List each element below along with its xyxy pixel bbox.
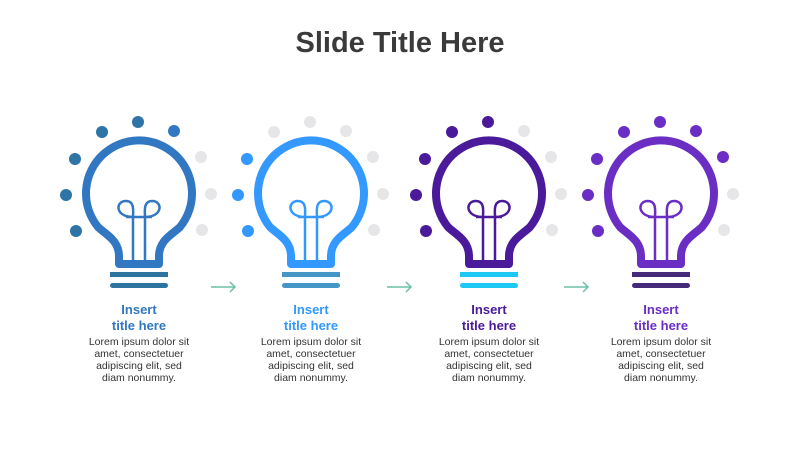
- arrow 3: [564, 282, 588, 292]
- text block 2: diam nonummy.: [274, 372, 348, 384]
- text block 3: title here: [462, 318, 516, 333]
- text block 4: Lorem ipsum dolor sit: [611, 336, 711, 348]
- text block 2: amet, consectetuer: [266, 348, 356, 360]
- arrow 2: [387, 282, 411, 292]
- text block 4: title here: [634, 318, 688, 333]
- text block 3: Lorem ipsum dolor sit: [439, 336, 539, 348]
- text block 3: Insert: [471, 302, 507, 317]
- text block 4: amet, consectetuer: [616, 348, 706, 360]
- text block 3: amet, consectetuer: [444, 348, 534, 360]
- text block 3: [439, 302, 539, 384]
- text block 1: [89, 302, 189, 384]
- text block 3: adipiscing elit, sed: [446, 360, 532, 372]
- text block 1: title here: [112, 318, 166, 333]
- text block 2: Insert: [293, 302, 329, 317]
- text block 1: diam nonummy.: [102, 372, 176, 384]
- text block 2: [261, 302, 361, 384]
- bulb 3: [410, 116, 567, 288]
- bulb 2: [232, 116, 389, 288]
- text block 1: Lorem ipsum dolor sit: [89, 336, 189, 348]
- text block 2: Lorem ipsum dolor sit: [261, 336, 361, 348]
- text block 4: diam nonummy.: [624, 372, 698, 384]
- text block 3: diam nonummy.: [452, 372, 526, 384]
- bulb 1: [60, 116, 217, 288]
- arrow 1: [211, 282, 235, 292]
- bulb 4: [582, 116, 739, 288]
- text block 2: adipiscing elit, sed: [268, 360, 354, 372]
- text block 1: Insert: [121, 302, 157, 317]
- text block 4: [611, 302, 711, 384]
- text block 2: title here: [284, 318, 338, 333]
- text block 4: adipiscing elit, sed: [618, 360, 704, 372]
- text block 4: Insert: [643, 302, 679, 317]
- text block 1: amet, consectetuer: [94, 348, 184, 360]
- title: Slide Title Here: [296, 27, 504, 59]
- text block 1: adipiscing elit, sed: [96, 360, 182, 372]
